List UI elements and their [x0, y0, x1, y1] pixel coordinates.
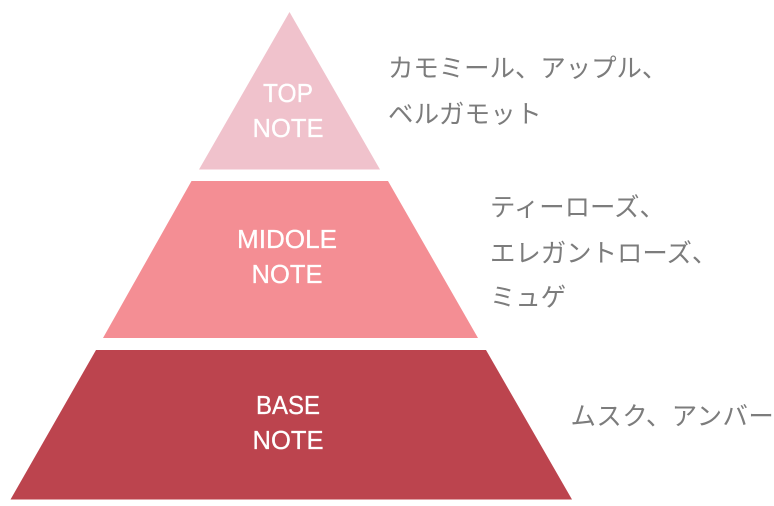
pyramid tier: top note [199, 12, 380, 170]
text: middle note ingredients: エレガントローズ、 [490, 240, 717, 268]
text: base note ingredients: ムスク、アンバー [570, 403, 774, 431]
pyramid tier: base note: BASE [256, 390, 320, 420]
pyramid tier: middle note: MIDOLE [237, 224, 337, 254]
text: middle note ingredients: ティーローズ、 [490, 194, 665, 222]
text: middle note ingredients [490, 194, 717, 312]
text: middle note ingredients: ミュゲ [490, 284, 566, 312]
text: top note ingredients: ベルガモット [388, 101, 542, 129]
pyramid tier: top note: TOP [263, 78, 313, 108]
pyramid tier: middle note: NOTE [252, 259, 322, 289]
pyramid tier: base note [10, 350, 572, 500]
text: top note ingredients [388, 55, 667, 129]
pyramid tier: middle note [103, 181, 478, 338]
text: top note ingredients: カモミール、アップル、 [388, 55, 667, 83]
pyramid tier: top note: NOTE [252, 113, 324, 143]
pyramid tier: base note: NOTE [252, 425, 324, 455]
